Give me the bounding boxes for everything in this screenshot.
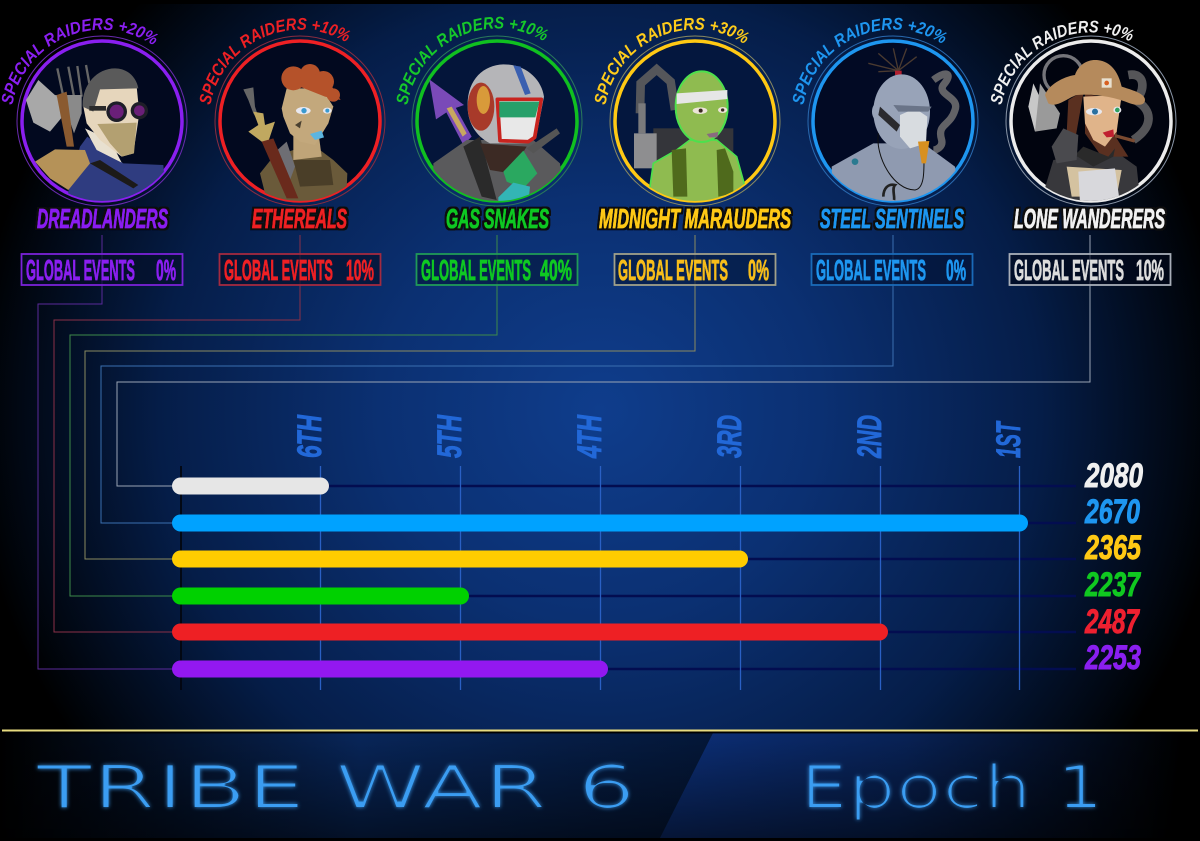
rank labels: 1ST (990, 420, 1028, 458)
tribe: Midnight Marauders (594, 18, 794, 287)
rank labels: 6TH (291, 414, 329, 458)
global events box: 0% (946, 255, 966, 287)
score values (1084, 457, 1143, 677)
bars (172, 478, 1028, 678)
score values: 2487 (1084, 603, 1140, 641)
title: TRIBE WAR 6 (34, 753, 636, 823)
portrait: Steel Sentinels (808, 36, 978, 206)
score values: 2237 (1084, 566, 1142, 604)
portrait: Midnight Marauders (610, 36, 780, 206)
portrait: Ethereals (215, 36, 385, 206)
global events box: GLOBAL EVENTS (26, 255, 135, 287)
connector lines from tribes to bars (38, 235, 1090, 669)
global events box (614, 254, 776, 287)
global events box: 10% (1136, 255, 1164, 287)
score values: 2253 (1084, 639, 1141, 677)
label: special raiders +30%: SPECIAL RAIDERS +30% (594, 18, 749, 104)
tribe name: ETHEREALS (252, 203, 347, 234)
tribe: Dreadlanders (2, 18, 188, 287)
global events box: 40% (540, 255, 572, 287)
bar chart: tribe scores (172, 414, 1143, 690)
tribe name: DREADLANDERS (37, 203, 168, 234)
footer panel (0, 730, 1200, 838)
tribe: Gas Snakes (396, 16, 582, 287)
global events box: GLOBAL EVENTS (421, 255, 531, 287)
score values: 2080 (1084, 457, 1143, 495)
rank labels (291, 414, 1028, 459)
global events box: 10% (346, 255, 374, 287)
global events box: GLOBAL EVENTS (224, 255, 333, 287)
global events box: 0% (156, 255, 176, 287)
portrait: Dreadlanders (17, 36, 187, 206)
rank labels: 3RD (711, 415, 749, 458)
global events box (22, 254, 182, 287)
rank labels: 5TH (431, 414, 469, 458)
tribe: Steel Sentinels (792, 18, 978, 287)
label: special raiders +20%: SPECIAL RAIDERS +20% (792, 18, 947, 104)
global events box: GLOBAL EVENTS (618, 255, 728, 287)
global events box: 0% (748, 255, 769, 287)
tribe: Lone Wanderers (991, 20, 1176, 287)
global events box (416, 254, 578, 287)
label: special raiders +20%: SPECIAL RAIDERS +20% (2, 18, 158, 104)
label: special raiders +10%: SPECIAL RAIDERS +10% (200, 18, 350, 104)
portrait: Lone Wanderers (1006, 36, 1176, 206)
subtitle: Epoch 1 (800, 753, 1104, 823)
portrait: Gas Snakes (412, 36, 582, 206)
score values: 2670 (1084, 493, 1140, 531)
rank labels: 4TH (571, 414, 609, 459)
tribe name: GAS SNAKES (446, 203, 549, 234)
tribe: Ethereals (200, 18, 386, 287)
global events box (220, 254, 380, 287)
rank labels: 2ND (851, 415, 889, 459)
label: special raiders +10%: SPECIAL RAIDERS +10% (396, 16, 548, 104)
score values: 2365 (1084, 529, 1142, 567)
label: special raiders +0%: SPECIAL RAIDERS +0% (991, 20, 1134, 104)
global events box (812, 254, 972, 287)
tribe name: MIDNIGHT MARAUDERS (599, 203, 791, 234)
tribe name: STEEL SENTINELS (820, 203, 964, 234)
global events box: GLOBAL EVENTS (816, 255, 926, 287)
